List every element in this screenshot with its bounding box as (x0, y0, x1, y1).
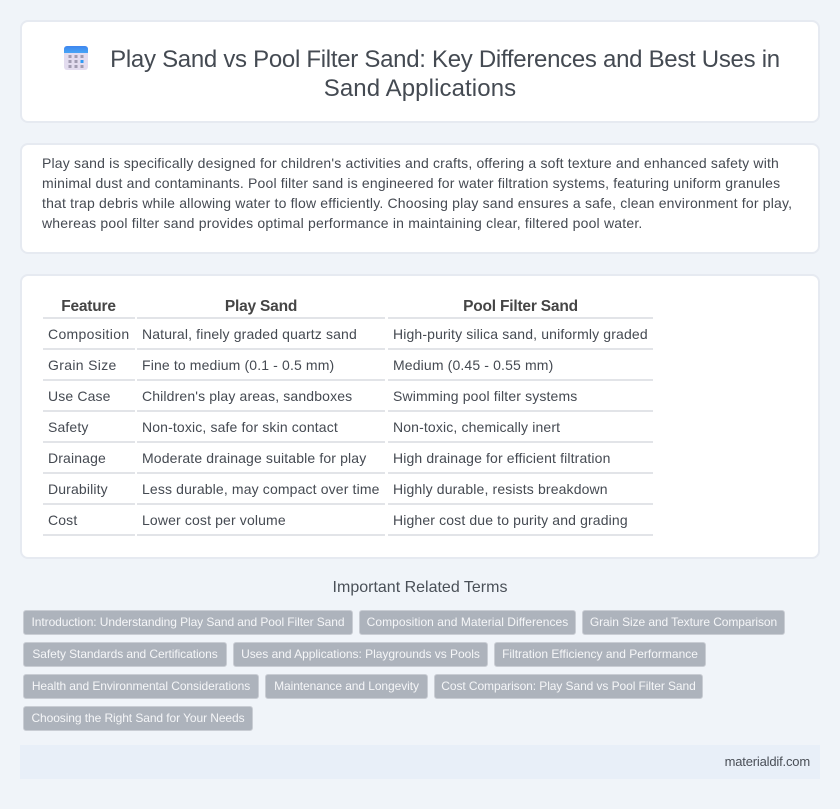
tag list: related terms: Grain Size and Texture Comparison (590, 615, 777, 629)
comparison table: Moderate drainage suitable for play (142, 450, 366, 466)
footer text: materialdif.com (725, 754, 810, 769)
text: introduction: minimal dust and contaminants. Pool filter sand is engineered for water filtration systems, featuring uniform granules (42, 175, 780, 191)
title (110, 46, 780, 102)
comparison table: Cost (48, 512, 77, 528)
tag list: related terms: Maintenance and Longevity (274, 679, 419, 693)
comparison table: Play Sand (225, 298, 297, 315)
panel: introduction (20, 143, 820, 254)
title: Play Sand vs Pool Filter Sand: Key Differences and Best Uses in (110, 46, 780, 73)
tag list: related terms: Filtration Efficiency and Performance (502, 647, 698, 661)
tag list: related terms (23, 610, 785, 731)
comparison table: Less durable, may compact over time (142, 481, 380, 497)
comparison table: Non-toxic, chemically inert (393, 419, 560, 435)
text: introduction (42, 155, 792, 231)
tag list: related terms: Safety Standards and Certifications (32, 647, 218, 661)
comparison table: Medium (0.45 - 0.55 mm) (393, 357, 553, 373)
tag list: related terms: Composition and Material Differences (367, 615, 568, 629)
comparison table: Fine to medium (0.1 - 0.5 mm) (142, 357, 334, 373)
icon: calendar (64, 46, 88, 70)
comparison table: Highly durable, resists breakdown (393, 481, 608, 497)
comparison table: Pool Filter Sand (463, 298, 578, 315)
comparison table: Lower cost per volume (142, 512, 286, 528)
comparison table: Grain Size (48, 357, 117, 373)
text: introduction: that trap debris while allowing water to flow efficiently. Choosing play sand ensures a safe, clean environment for play, (42, 195, 792, 211)
comparison table: Non-toxic, safe for skin contact (142, 419, 338, 435)
tag list: related terms: Choosing the Right Sand for Your Needs (31, 711, 245, 725)
tag list: related terms: Uses and Applications: Playgrounds vs Pools (241, 647, 480, 661)
comparison table: Swimming pool filter systems (393, 388, 577, 404)
tag list: related terms: Health and Environmental Considerations (32, 679, 250, 693)
comparison table: High-purity silica sand, uniformly graded (393, 326, 648, 342)
text: introduction: Play sand is specifically designed for children's activities and crafts, offering a soft texture and enhanced safety with (42, 155, 779, 171)
comparison table (43, 298, 653, 536)
panel: header (20, 20, 820, 123)
footer bar (20, 745, 820, 779)
comparison table: Use Case (48, 388, 111, 404)
comparison table: Natural, finely graded quartz sand (142, 326, 357, 342)
title: Sand Applications (324, 75, 516, 102)
tag list: related terms: Introduction: Understanding Play Sand and Pool Filter Sand (32, 615, 344, 629)
tag list: related terms: Cost Comparison: Play Sand vs Pool Filter Sand (441, 679, 696, 693)
comparison table: Composition (48, 326, 129, 342)
panel: comparison table card (20, 274, 820, 559)
comparison table: Feature (61, 298, 116, 315)
comparison table: Drainage (48, 450, 106, 466)
comparison table: Durability (48, 481, 108, 497)
text: introduction: whereas pool filter sand provides optimal performance in maintaining clear, filtered pool water. (42, 215, 643, 231)
comparison table: Children's play areas, sandboxes (142, 388, 352, 404)
comparison table: Safety (48, 419, 89, 435)
heading: related terms: Important Related Terms (333, 579, 507, 596)
comparison table: High drainage for efficient filtration (393, 450, 611, 466)
comparison table: Higher cost due to purity and grading (393, 512, 628, 528)
